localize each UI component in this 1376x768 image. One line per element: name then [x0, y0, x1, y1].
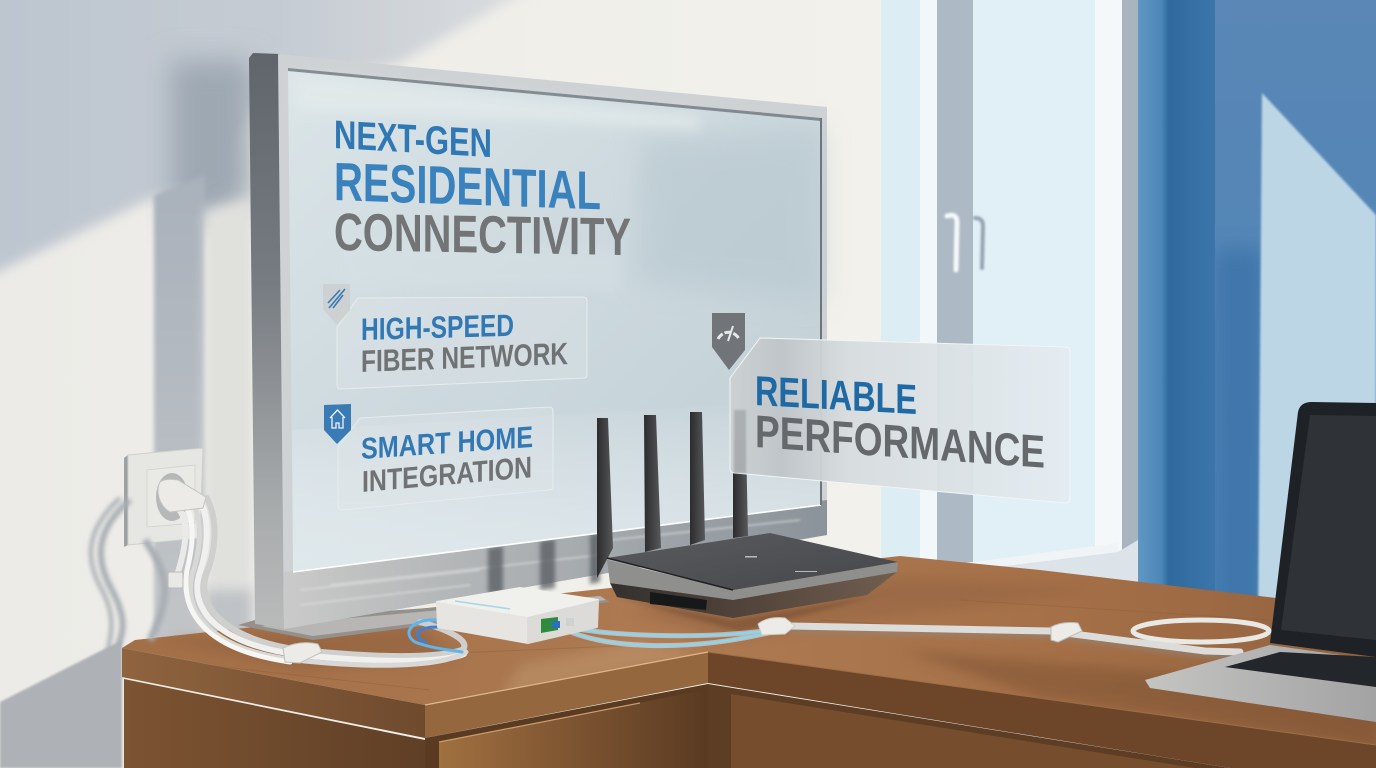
cable clip on wall [168, 572, 183, 588]
cable shadow on wall [91, 498, 165, 650]
cable coil [1133, 620, 1269, 642]
wall [0, 0, 882, 768]
drawer left [124, 679, 425, 768]
title: NEXT-GEN [334, 113, 492, 166]
label [755, 367, 1045, 478]
label: PERFORMANCE [755, 405, 1045, 478]
plate shadow [124, 455, 128, 547]
blue curtain and wall [1138, 0, 1376, 620]
label: INTEGRATION [362, 451, 532, 499]
box status light [455, 601, 510, 609]
antenna seen through panel [734, 410, 746, 473]
power cables [158, 479, 466, 665]
fiber terminal box [437, 588, 598, 643]
icon: window handles [947, 215, 983, 270]
wall outlet [91, 448, 203, 650]
label [361, 308, 568, 379]
desk front middle [425, 652, 708, 738]
icon: house badge [324, 404, 351, 444]
router base [610, 572, 897, 618]
fiber cables [409, 620, 772, 652]
label: FIBER NETWORK [361, 336, 568, 379]
base plate [238, 596, 610, 640]
title: RESIDENTIAL [334, 152, 601, 221]
top inner lip [288, 68, 821, 121]
drawer middle [425, 684, 708, 768]
network cable and clips [758, 618, 1269, 656]
wall shadow: beside display [205, 200, 252, 640]
clip: right [1051, 622, 1082, 642]
router lights [745, 556, 817, 572]
label [361, 421, 533, 499]
cable clip on desk [283, 643, 322, 663]
title: CONNECTIVITY [334, 203, 631, 267]
laptop [1145, 402, 1376, 722]
laptop base [1145, 645, 1376, 722]
plug [158, 479, 206, 512]
display: glass board in metal frame [238, 53, 827, 640]
router silver band [607, 560, 898, 600]
panel: high-speed fiber network [323, 284, 587, 389]
label: RELIABLE [755, 367, 917, 423]
green fiber port [541, 617, 558, 633]
box front [437, 603, 528, 643]
wall shadow: behind display [154, 175, 205, 640]
glass pane [288, 68, 821, 572]
panel: reliable performance [712, 313, 1070, 503]
label: SMART HOME [361, 421, 533, 466]
laptop screen [1281, 415, 1376, 640]
router [607, 533, 900, 632]
router top [607, 533, 898, 590]
keyboard [1225, 652, 1376, 687]
bottom bar streaks [300, 520, 800, 605]
laptop lid [1270, 402, 1376, 657]
wall shadow: low behind display [205, 590, 252, 640]
wall shadow: upper diagonal [0, 0, 545, 280]
drawer right [708, 684, 1230, 768]
frame side [249, 53, 284, 628]
bottom bar reflections [488, 532, 600, 594]
icon: router vent [650, 592, 707, 610]
socket shadow [156, 473, 188, 521]
sunlight patch [1258, 93, 1376, 620]
window [881, 0, 1138, 600]
box side [528, 601, 598, 643]
desk top [122, 556, 1376, 745]
wall shadow: dark blob beside display [170, 60, 252, 225]
box top [437, 588, 598, 617]
panel: smart home integration [324, 404, 553, 510]
title [334, 113, 631, 267]
wall shadow: corner [0, 640, 122, 768]
icon: fiber lines badge [323, 284, 350, 325]
desk front right [708, 652, 1376, 768]
antennas [597, 412, 748, 578]
desk front left [122, 648, 425, 738]
clip: left [758, 618, 795, 635]
icon: gauge badge [712, 313, 745, 370]
metal bottom bar [284, 500, 827, 629]
desk [122, 556, 1376, 768]
label: HIGH-SPEED [361, 308, 514, 347]
frame face [278, 54, 827, 629]
router shadow [617, 590, 900, 632]
